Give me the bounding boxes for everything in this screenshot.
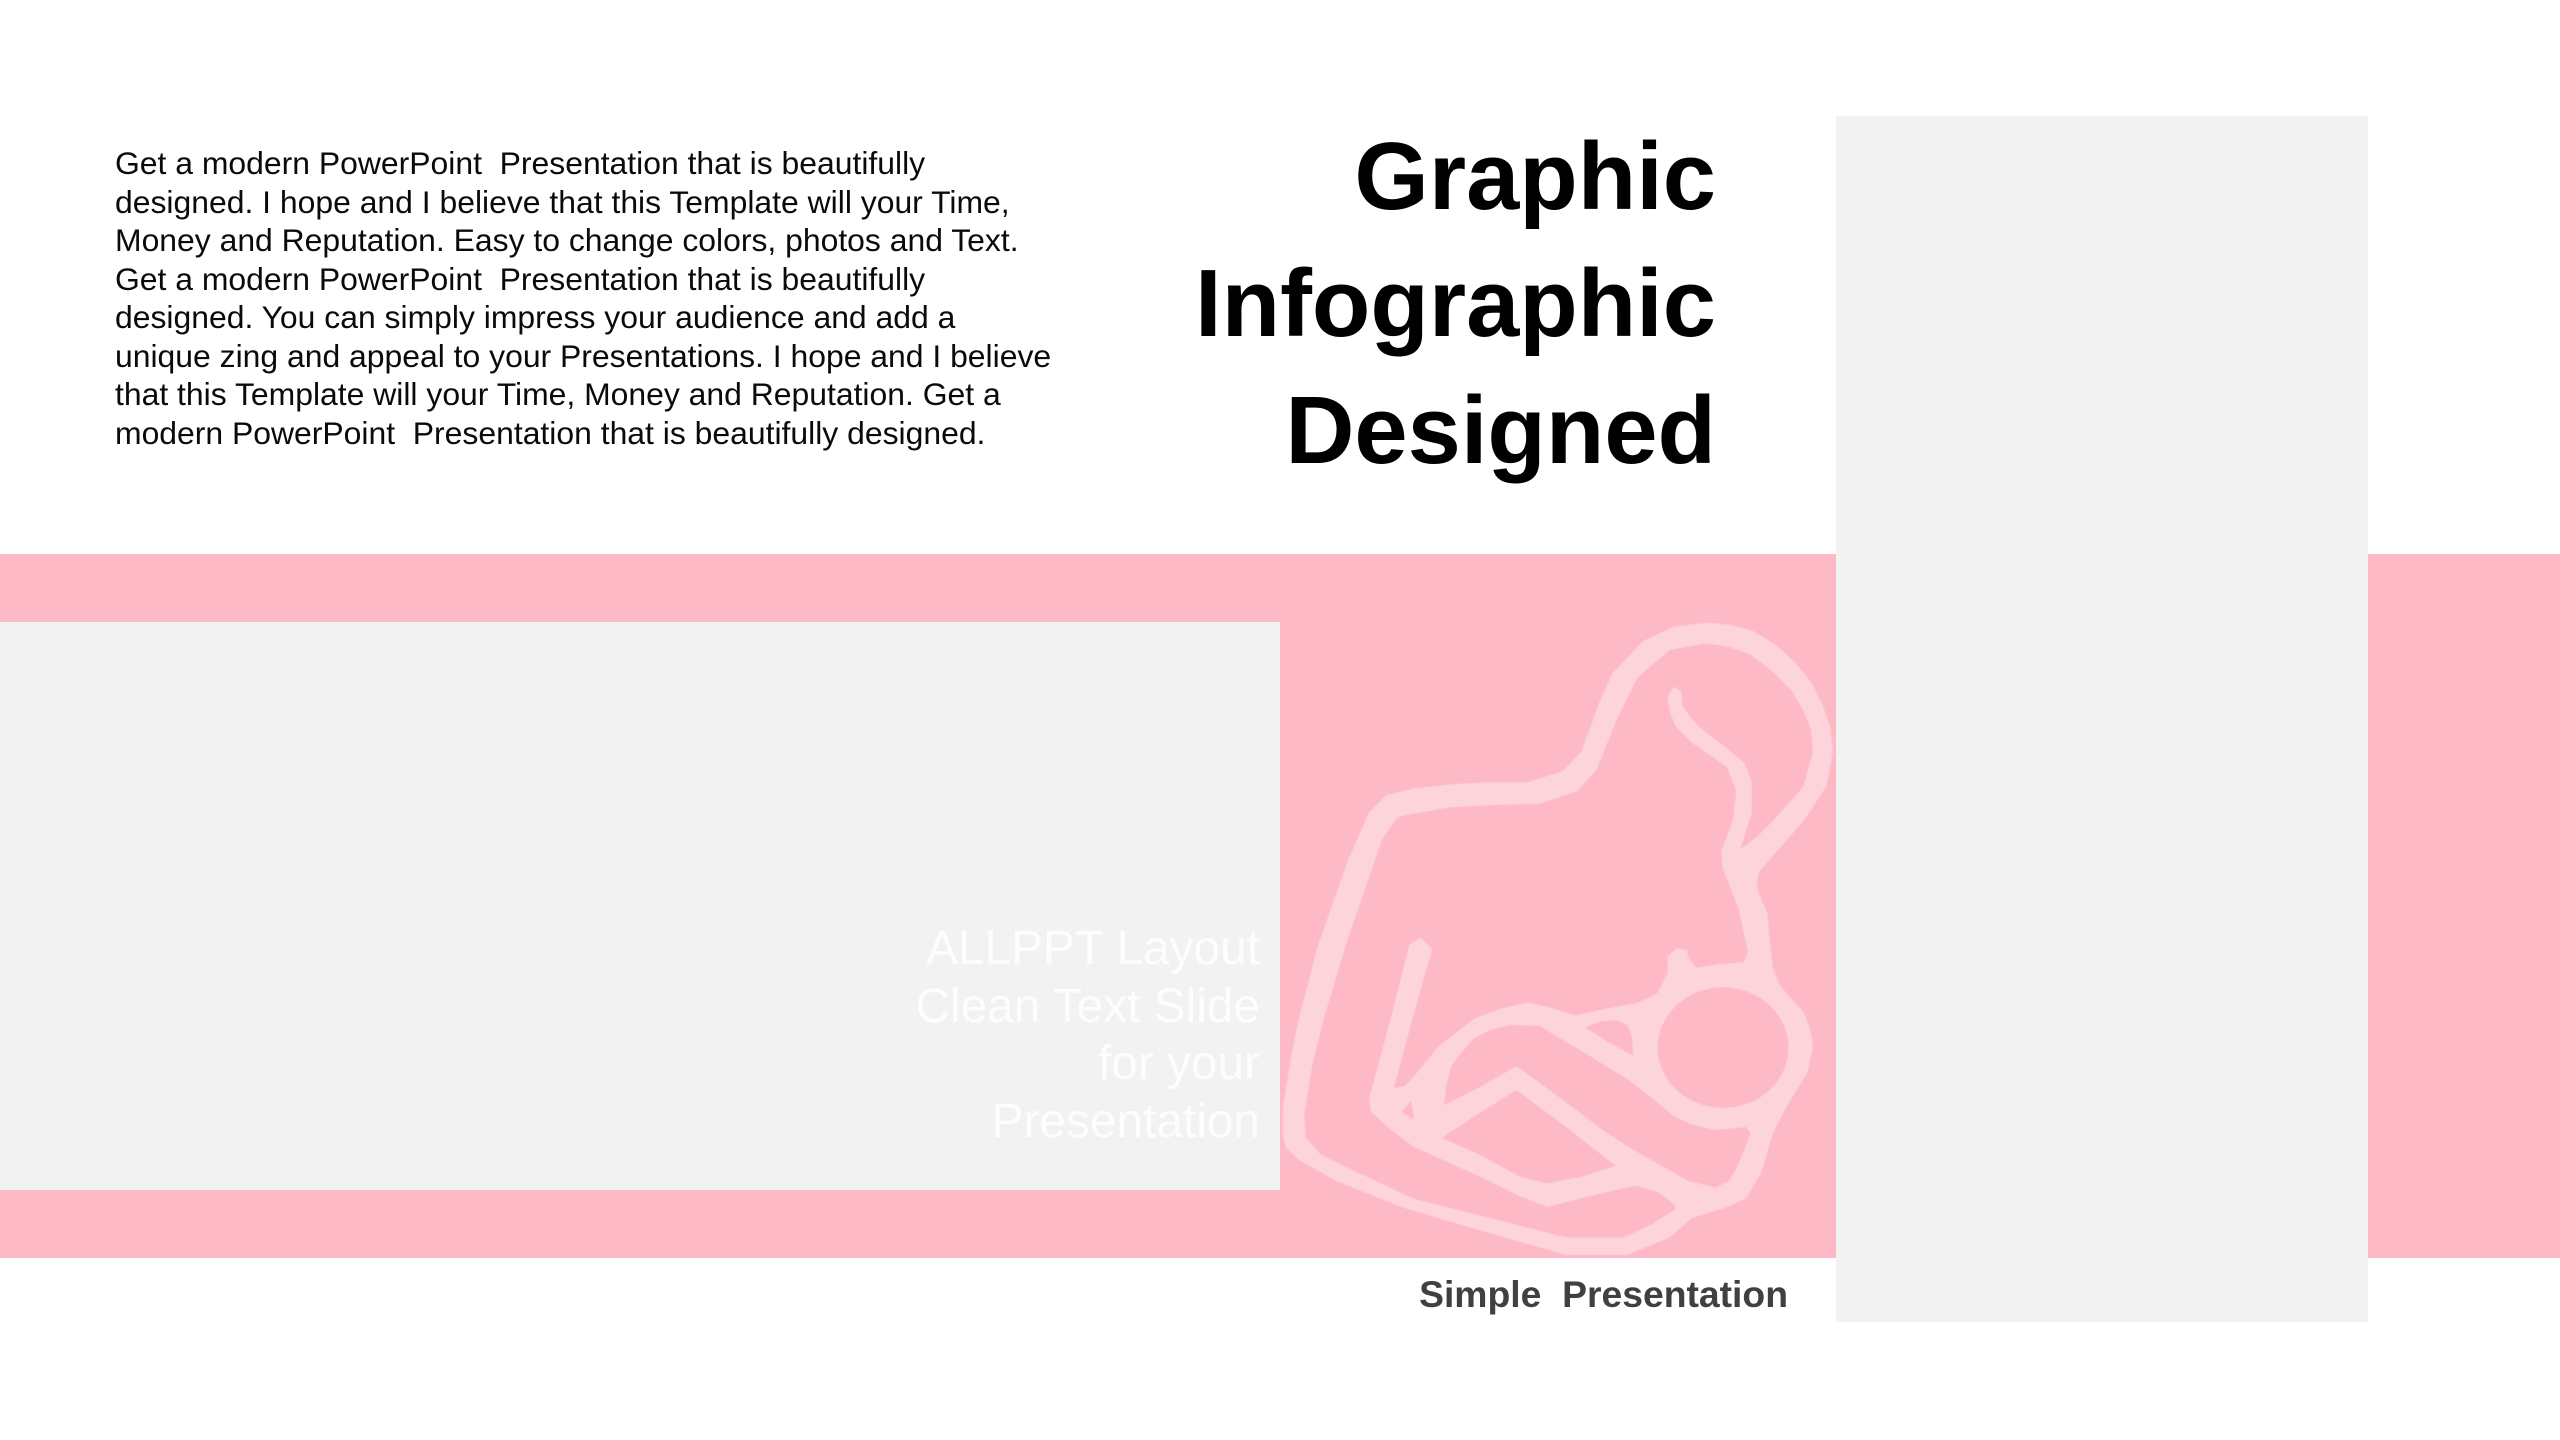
text block: intro paragraph: designed. You can simply impress your audience and add a — [115, 299, 955, 335]
text block: intro paragraph: Get a modern PowerPoint Presentation that is beautifully — [115, 261, 925, 297]
pink horizontal band — [0, 554, 2560, 1258]
text block: intro paragraph — [115, 145, 1051, 451]
panel: left grey block — [0, 622, 1280, 1190]
icon: mother breastfeeding baby — [1282, 622, 1833, 1255]
caption: simple presentation: Simple Presentation — [1419, 1273, 1788, 1315]
title — [1195, 123, 1716, 484]
text block: intro paragraph: unique zing and appeal to your Presentations. I hope and I believe — [115, 338, 1051, 374]
text block: intro paragraph: Get a modern PowerPoint Presentation that is beautifully — [115, 145, 925, 181]
text block: intro paragraph: that this Template will your Time, Money and Reputation. Get a — [115, 376, 1001, 412]
text block: faint layout caption: Presentation — [992, 1095, 1260, 1148]
panel: right grey column — [1836, 116, 2368, 1322]
title: Graphic — [1354, 123, 1716, 230]
text block: intro paragraph: designed. I hope and I believe that this Template will your Time, — [115, 184, 1010, 220]
text block: intro paragraph: Money and Reputation. Easy to change colors, photos and Text. — [115, 222, 1019, 258]
text block: faint layout caption: for your — [1098, 1037, 1260, 1090]
text block: intro paragraph: modern PowerPoint Presentation that is beautifully designed. — [115, 415, 985, 451]
title: Infographic — [1195, 250, 1716, 357]
text block: faint layout caption — [915, 922, 1260, 1148]
text block: faint layout caption: Clean Text Slide — [915, 980, 1260, 1033]
title: Designed — [1285, 377, 1716, 484]
text block: faint layout caption: ALLPPT Layout — [926, 922, 1260, 975]
